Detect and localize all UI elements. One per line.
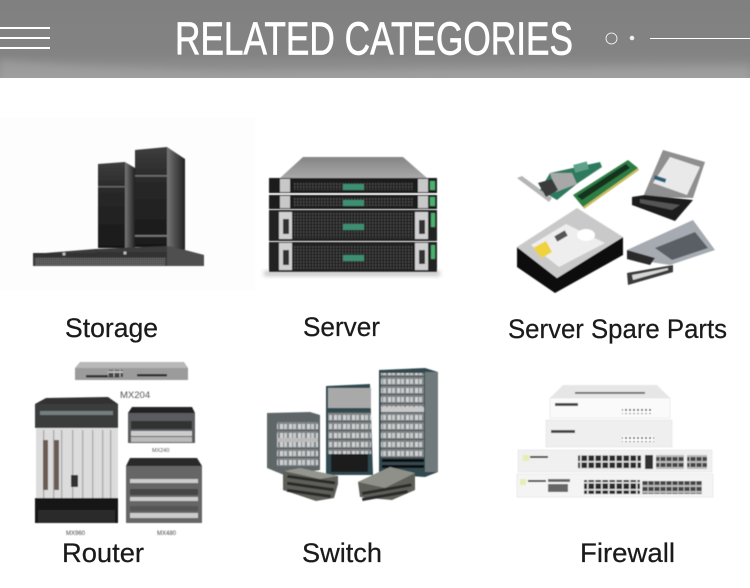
server product image	[264, 157, 440, 276]
firewall unit 3	[518, 450, 712, 472]
router product image	[35, 362, 202, 537]
MX960 router: MX960	[66, 531, 86, 537]
label: server: Server	[303, 312, 380, 342]
server unit 2	[269, 195, 437, 209]
label: switch: Switch	[302, 538, 382, 568]
panel: server spare parts	[508, 150, 727, 344]
server unit 4	[269, 242, 437, 272]
panel: router	[35, 362, 202, 568]
panel: server	[264, 157, 440, 342]
panel: switch	[267, 368, 438, 568]
left small switches	[283, 468, 338, 501]
firewall box 1	[550, 385, 670, 418]
MX480 router	[126, 458, 202, 537]
server unit 3	[269, 210, 437, 241]
firewall box 2	[546, 420, 672, 447]
header banner	[0, 0, 750, 78]
storage product image	[33, 147, 204, 266]
menu lines icon	[0, 27, 50, 49]
title: RELATED CATEGORIES	[175, 12, 573, 64]
label: firewall: Firewall	[580, 538, 675, 568]
label: server spare parts: Server Spare Parts	[508, 314, 727, 344]
drive tray	[627, 220, 715, 285]
left chassis	[267, 412, 320, 475]
MX204 router	[75, 362, 188, 401]
MX204 router: MX204	[120, 390, 150, 401]
label: storage: Storage	[65, 313, 158, 343]
panel: storage	[0, 118, 255, 343]
MX480 router: MX480	[157, 531, 177, 537]
label: router: Router	[62, 538, 144, 568]
switch product image	[267, 368, 438, 501]
memory module	[573, 160, 639, 209]
center chassis	[326, 384, 373, 475]
spare parts product image	[517, 150, 715, 293]
network card	[517, 161, 602, 202]
firewall unit 4	[517, 474, 713, 497]
panel: firewall	[517, 385, 713, 568]
right chassis	[379, 368, 438, 477]
firewall product image	[517, 385, 713, 497]
right small switches	[358, 467, 415, 501]
hard drive with caddy	[632, 150, 705, 221]
server unit 1	[269, 178, 437, 193]
MX960 router	[35, 397, 118, 537]
large hard drive	[517, 208, 623, 293]
decorative circles and line	[606, 33, 750, 44]
MX240 router	[128, 407, 195, 454]
MX240 router: MX240	[152, 448, 169, 454]
